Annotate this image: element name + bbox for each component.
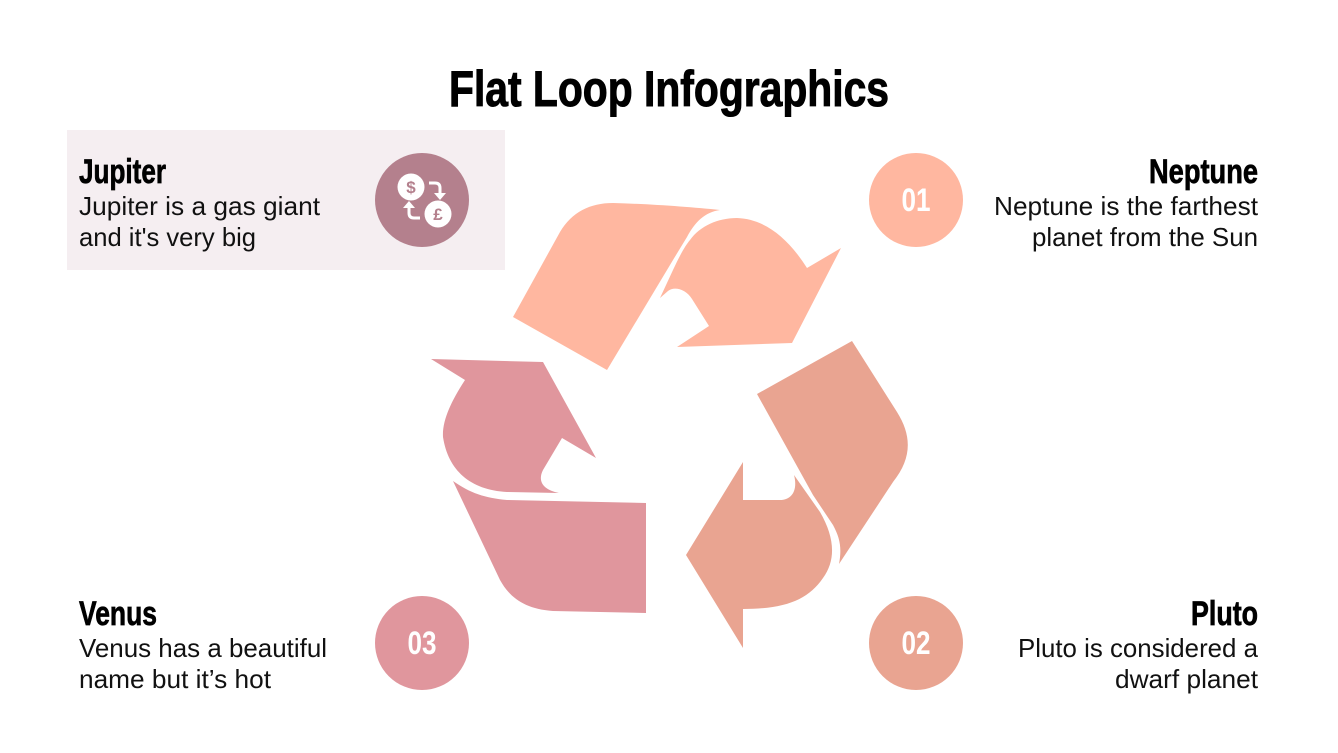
arrow: salmon	[686, 341, 908, 648]
heading: Jupiter: Jupiter	[79, 153, 166, 191]
arrow: pink	[431, 359, 646, 613]
heading: Pluto: Pluto	[1191, 595, 1258, 633]
badge: 01	[869, 153, 963, 247]
badge: 02: 02	[902, 625, 930, 661]
icon: currency exchange: £	[433, 205, 443, 224]
panel: Jupiter	[67, 130, 505, 270]
text: Neptune description	[994, 191, 1259, 252]
text: Jupiter description	[79, 191, 321, 252]
recycling loop	[431, 203, 908, 648]
title: Flat Loop Infographics	[449, 61, 889, 117]
icon: currency exchange	[375, 153, 469, 247]
heading: Venus: Venus	[79, 595, 157, 633]
text: Neptune description: planet from the Sun	[1032, 222, 1258, 252]
text: Venus description: name but it’s hot	[79, 664, 272, 694]
badge: 03	[375, 596, 469, 690]
badge: 02	[869, 596, 963, 690]
icon: currency exchange: $	[406, 178, 416, 197]
arrow: peach	[513, 203, 841, 370]
text: Jupiter description: Jupiter is a gas giant	[79, 191, 321, 221]
heading: Neptune: Neptune	[1149, 153, 1258, 191]
text: Neptune description: Neptune is the farthest	[994, 191, 1259, 221]
text: Pluto description: dwarf planet	[1115, 664, 1259, 694]
block: Pluto	[869, 595, 1259, 694]
badge: 01: 01	[902, 182, 930, 218]
block: Neptune	[869, 153, 1259, 252]
block: Venus	[79, 595, 469, 694]
badge: 03: 03	[408, 625, 436, 661]
text: Jupiter description: and it's very big	[79, 222, 256, 252]
text: Pluto description: Pluto is considered a	[1018, 633, 1259, 663]
text: Pluto description	[1018, 633, 1259, 694]
text: Venus description: Venus has a beautiful	[79, 633, 327, 663]
text: Venus description	[79, 633, 327, 694]
